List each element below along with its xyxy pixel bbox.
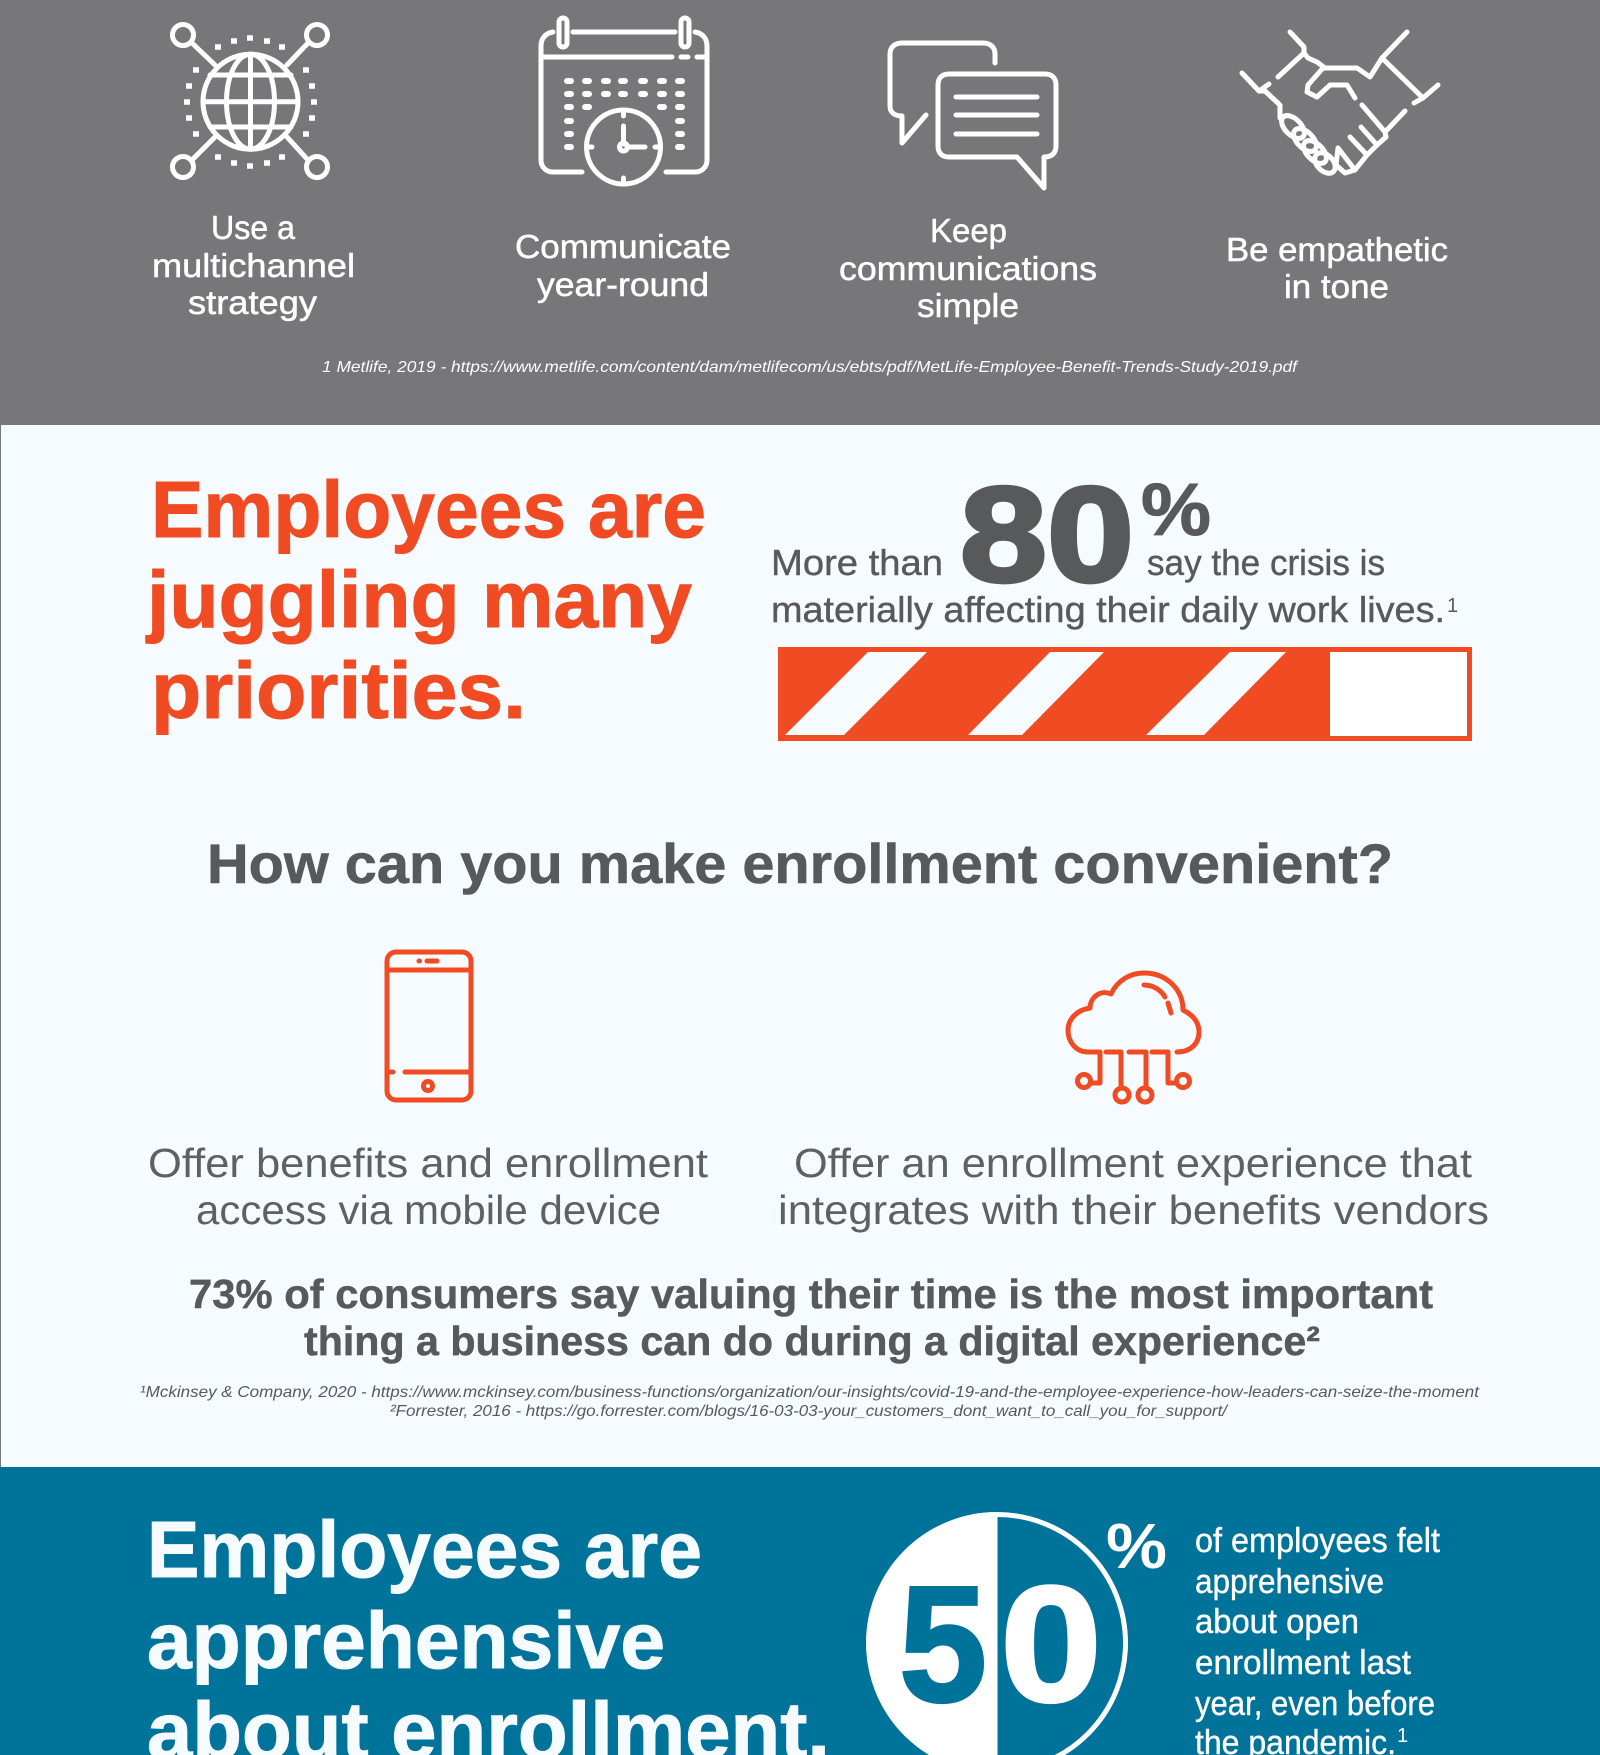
label: multichannel strategy: strategy — [188, 284, 318, 321]
progress bar: 80 percent — [778, 647, 1472, 741]
stat: more than 80 percent: More than — [771, 542, 943, 583]
label: keep communications simple: simple — [917, 287, 1019, 324]
text: employees felt apprehensive: enrollment last — [1195, 1644, 1412, 1682]
icon: smartphone — [387, 952, 471, 1100]
label: multichannel strategy: multichannel — [152, 247, 355, 284]
label: keep communications simple: Keep — [930, 212, 1007, 249]
icon: handshake — [1242, 32, 1438, 177]
label: keep communications simple — [839, 212, 1097, 324]
stat: 50 percent half circle: % — [1106, 1510, 1167, 1582]
label: be empathetic in tone — [1226, 231, 1448, 305]
label: multichannel strategy — [152, 209, 355, 321]
label: communicate year-round — [515, 228, 731, 303]
icon: speech bubbles — [890, 43, 1056, 188]
text: vendor integration — [778, 1140, 1489, 1233]
text: employees felt apprehensive — [1195, 1522, 1441, 1755]
label: multichannel strategy: Use a — [211, 209, 296, 246]
stat: 50 percent half circle: 0 — [1000, 1552, 1102, 1736]
stat: more than 80 percent: say the crisis is — [1147, 542, 1385, 583]
footnote: MetLife source: 1 Metlife, 2019 - https://www.metlife.com/content/dam/metlifecom/us/ebts/pdf/MetLife-Employee-Benefit-Trends-Study-2019.pdf — [322, 359, 1299, 376]
panel: communication tips — [0, 0, 1600, 425]
text: mobile access — [148, 1140, 709, 1233]
icon: globe network — [172, 24, 328, 178]
stat: more than 80 percent: materially affecting their daily work lives. — [771, 589, 1445, 630]
heading: employees are apprehensive about enrollment: Employees are — [147, 1505, 702, 1594]
text: employees felt apprehensive: 1 — [1397, 1725, 1408, 1747]
text: vendor integration: Offer an enrollment experience that — [794, 1140, 1473, 1186]
text: vendor integration: integrates with their benefits vendors — [778, 1187, 1489, 1233]
label: keep communications simple: communications — [839, 250, 1097, 287]
icon: cloud with circuit — [1068, 973, 1199, 1102]
heading: employees are apprehensive about enrollment — [147, 1505, 830, 1755]
label: be empathetic in tone: Be empathetic — [1226, 231, 1448, 268]
stat: more than 80 percent: 1 — [1447, 595, 1458, 617]
stat: more than 80 percent: 80 — [960, 459, 1134, 610]
heading: employees are juggling many priorities — [145, 465, 706, 735]
heading: employees are apprehensive about enrollment: apprehensive — [147, 1596, 665, 1685]
label: communicate year-round: Communicate — [515, 228, 731, 265]
footnotes: McKinsey and Forrester sources: ²Forrester, 2016 - https://go.forrester.com/blogs/16-03-03-your_customers_dont_want_to_call_you_for_support/ — [390, 1403, 1229, 1420]
text: employees felt apprehensive: about open — [1195, 1603, 1359, 1641]
text: mobile access: access via mobile device — [196, 1187, 661, 1233]
text: employees felt apprehensive: apprehensive — [1195, 1563, 1384, 1601]
stat: 50 percent half circle — [866, 1510, 1167, 1755]
heading: employees are juggling many priorities: Employees are — [151, 465, 706, 554]
stat: more than 80 percent: % — [1141, 468, 1211, 551]
footnotes: McKinsey and Forrester sources: ¹Mckinsey & Company, 2020 - https://www.mckinsey.com/business-functions/organization/our-insights/covid-19-and-the-employee-experience-how-leaders-can-seize-the-moment — [140, 1384, 1480, 1401]
footnotes: McKinsey and Forrester sources — [140, 1384, 1480, 1420]
label: communicate year-round: year-round — [537, 266, 709, 303]
heading: how can you make enrollment convenient: How can you make enrollment convenient? — [207, 832, 1393, 895]
stat: 50 percent half circle: 5 — [899, 1552, 987, 1736]
text: employees felt apprehensive: of employees felt — [1195, 1522, 1441, 1560]
label: be empathetic in tone: in tone — [1284, 268, 1389, 305]
callout: 73 percent of consumers: thing a business can do during a digital experience² — [304, 1318, 1320, 1364]
icon: calendar with clock — [541, 18, 707, 184]
callout: 73 percent of consumers — [189, 1271, 1433, 1364]
panel: apprehensive about enrollment — [0, 1467, 1600, 1755]
text: employees felt apprehensive: year, even before — [1195, 1685, 1435, 1723]
callout: 73 percent of consumers: 73% of consumers say valuing their time is the most important — [189, 1271, 1433, 1317]
stat: more than 80 percent — [771, 459, 1458, 630]
heading: employees are juggling many priorities: juggling many — [145, 555, 693, 644]
text: mobile access: Offer benefits and enrollment — [148, 1140, 709, 1186]
panel: juggling priorities and convenience — [0, 425, 1600, 1467]
heading: employees are juggling many priorities: priorities. — [151, 646, 526, 735]
